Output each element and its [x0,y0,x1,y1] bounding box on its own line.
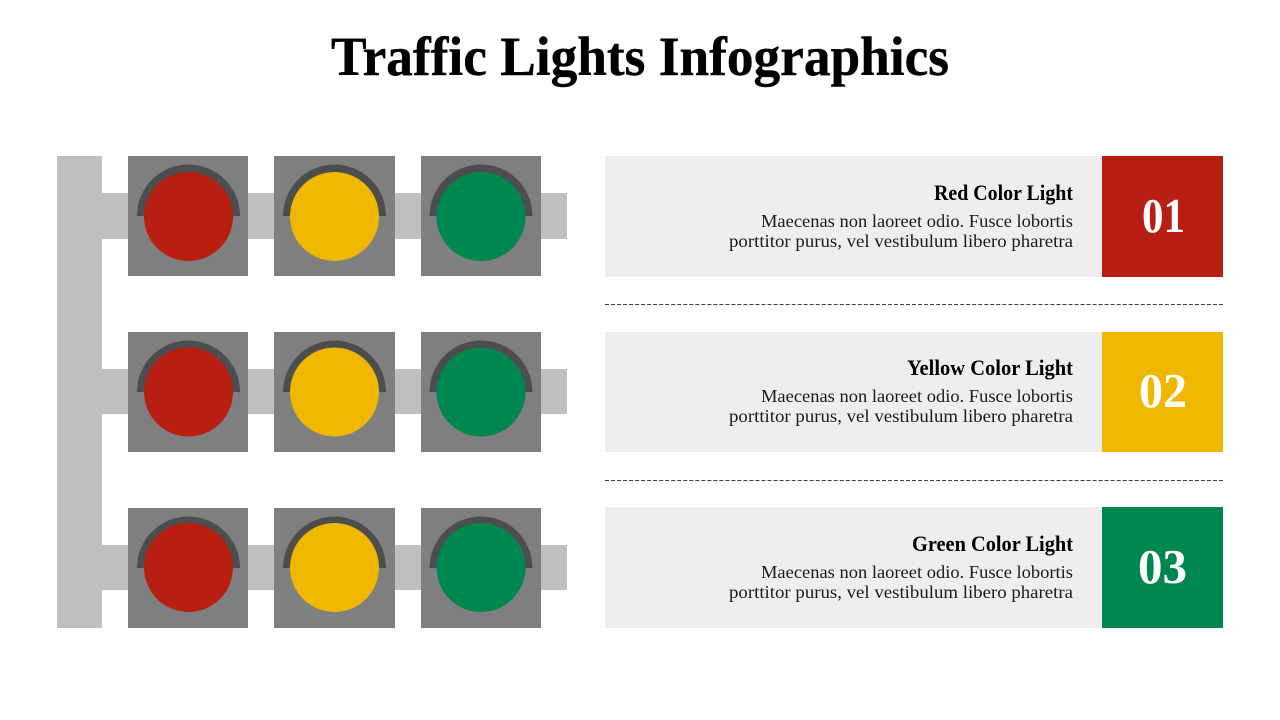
red signal [128,508,248,628]
yellow signal [274,508,395,628]
red signal [128,156,248,276]
yellow signal [274,156,395,276]
green signal [421,332,541,452]
panel: green color light [605,507,1223,628]
description: yellow: porttitor purus, vel vestibulum libero pharetra [729,406,1073,426]
traffic light pole structure [57,156,567,628]
yellow signal [274,332,395,452]
description: yellow: Maecenas non laoreet odio. Fusce lobortis [761,386,1073,406]
heading: yellow: Yellow Color Light [907,355,1074,380]
description: yellow [729,386,1073,426]
traffic light row 3 [128,508,541,628]
traffic light row 1 [128,156,541,276]
description: green: porttitor purus, vel vestibulum libero pharetra [729,582,1073,602]
number 02: 02 [1139,363,1187,418]
traffic light row 2 [128,332,541,452]
heading: red: Red Color Light [934,180,1074,205]
description: red: porttitor purus, vel vestibulum libero pharetra [729,231,1073,251]
number 01: 01 [1142,188,1185,243]
title: Traffic Lights Infographics [331,26,949,87]
description: red [729,211,1073,251]
panel: red color light [605,156,1223,277]
green signal [421,508,541,628]
number 03: 03 [1138,539,1187,594]
green signal [421,156,541,276]
description: red: Maecenas non laoreet odio. Fusce lobortis [761,211,1073,231]
panel: yellow color light [605,332,1223,452]
description: green [729,562,1073,602]
red signal [128,332,248,452]
heading: green: Green Color Light [912,531,1074,556]
description: green: Maecenas non laoreet odio. Fusce lobortis [761,562,1073,582]
